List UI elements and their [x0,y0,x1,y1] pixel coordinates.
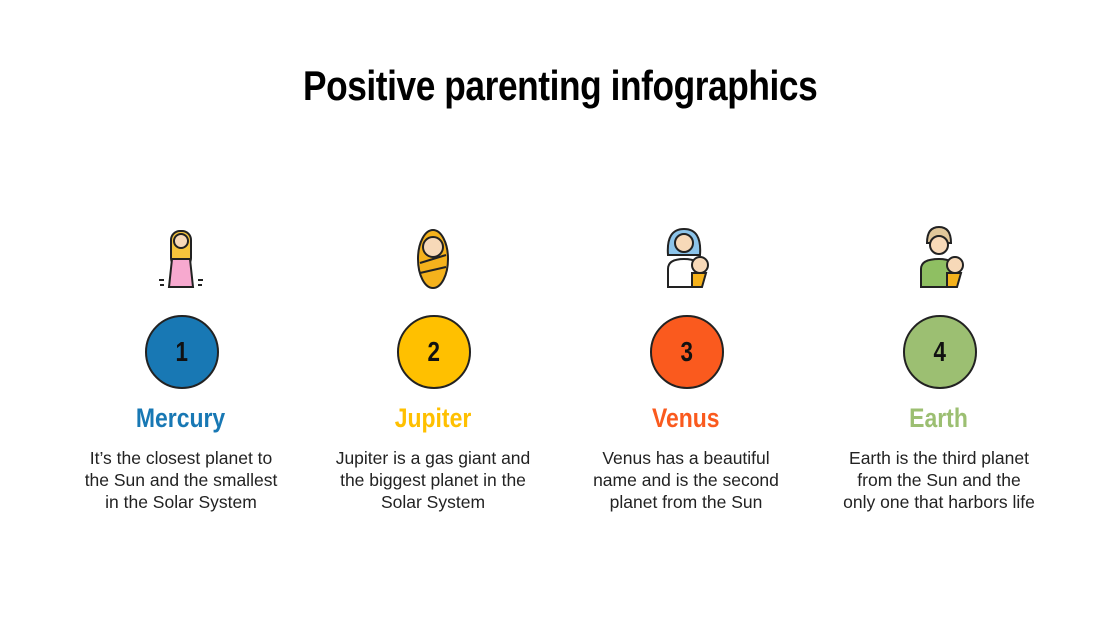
text [85,448,278,512]
text: planet from the Sun [610,492,762,512]
number circle 3 [650,315,724,389]
text: Jupiter is a gas giant and [336,448,530,468]
text: in the Solar System [105,492,257,512]
number circle 2 [397,315,471,389]
number circle 1 [145,315,219,389]
text: the biggest planet in the [340,470,526,490]
heading: Jupiter [395,403,471,433]
column: Earth [843,226,1035,512]
column: Jupiter [336,229,530,512]
text [843,448,1035,512]
icon: pregnant woman [159,230,203,288]
number circle 3: 3 [681,336,693,367]
heading: Earth [910,403,968,433]
number circle 4: 4 [934,336,946,367]
icon: swaddled baby [417,229,449,289]
heading: Mercury [136,403,226,433]
number circle 1: 1 [176,336,188,367]
text: the Sun and the smallest [85,470,277,490]
text: name and is the second [593,470,779,490]
title: Positive parenting infographics [303,62,817,109]
icon: mother with baby [666,228,709,288]
text: from the Sun and the [857,470,1021,490]
text: Venus has a beautiful [602,448,770,468]
column: Venus [593,228,779,512]
text [336,448,530,512]
column: Mercury [85,230,278,512]
text: Solar System [381,492,485,512]
text: It’s the closest planet to [90,448,272,468]
text [593,448,779,512]
text: only one that harbors life [843,492,1035,512]
heading: Venus [652,403,720,433]
number circle 2: 2 [428,336,440,367]
number circle 4 [903,315,977,389]
text: Earth is the third planet [849,448,1029,468]
icon: father with baby [920,226,964,288]
